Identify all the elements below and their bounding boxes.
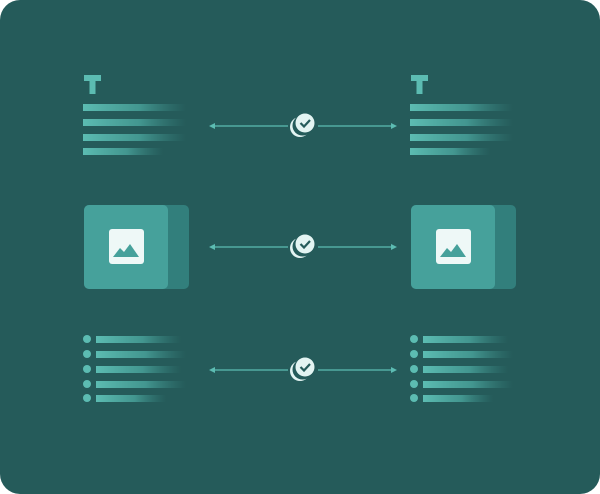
arrow row 1 with check xyxy=(209,110,397,138)
bullet list xyxy=(83,335,186,402)
right column xyxy=(410,75,516,402)
image card xyxy=(84,205,189,289)
heading icon: T xyxy=(84,75,101,94)
text lines block xyxy=(83,104,186,155)
image card right xyxy=(411,205,516,289)
bullet list right xyxy=(410,335,513,402)
heading icon: T right xyxy=(411,75,428,94)
arrow row 3 with check xyxy=(209,354,397,382)
arrow row 2 with check xyxy=(209,231,397,259)
text lines block right xyxy=(410,104,513,155)
left column xyxy=(83,75,189,402)
